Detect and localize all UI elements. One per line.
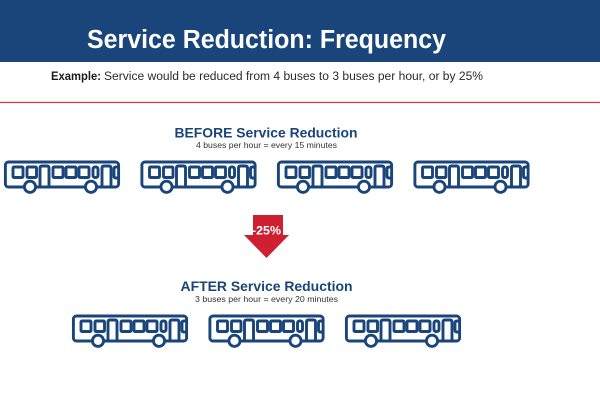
arrow: -25% reduction: -25%	[252, 226, 281, 238]
before subheading: 4 buses per hour = every 15 minutes	[196, 140, 337, 150]
title: Service Reduction: Frequency	[87, 26, 447, 54]
bus 3	[278, 162, 392, 192]
before buses	[5, 162, 528, 192]
after buses	[73, 316, 460, 346]
arrow: -25% reduction	[244, 215, 289, 258]
example text: Example:	[51, 71, 101, 83]
before heading: BEFORE Service Reduction	[174, 124, 358, 140]
example text: Service would be reduced from 4 buses to 3 buses per hour, or by 25%	[104, 71, 483, 83]
after subheading: 3 buses per hour = every 20 minutes	[195, 294, 338, 304]
bus 1	[73, 316, 187, 346]
bus 2	[142, 162, 256, 192]
bus 4	[415, 162, 528, 192]
bus 3	[346, 316, 460, 346]
bus 2	[210, 316, 324, 346]
after heading: AFTER Service Reduction	[180, 278, 352, 294]
red divider	[0, 102, 600, 103]
bus 1	[5, 162, 119, 192]
header band	[0, 0, 600, 62]
